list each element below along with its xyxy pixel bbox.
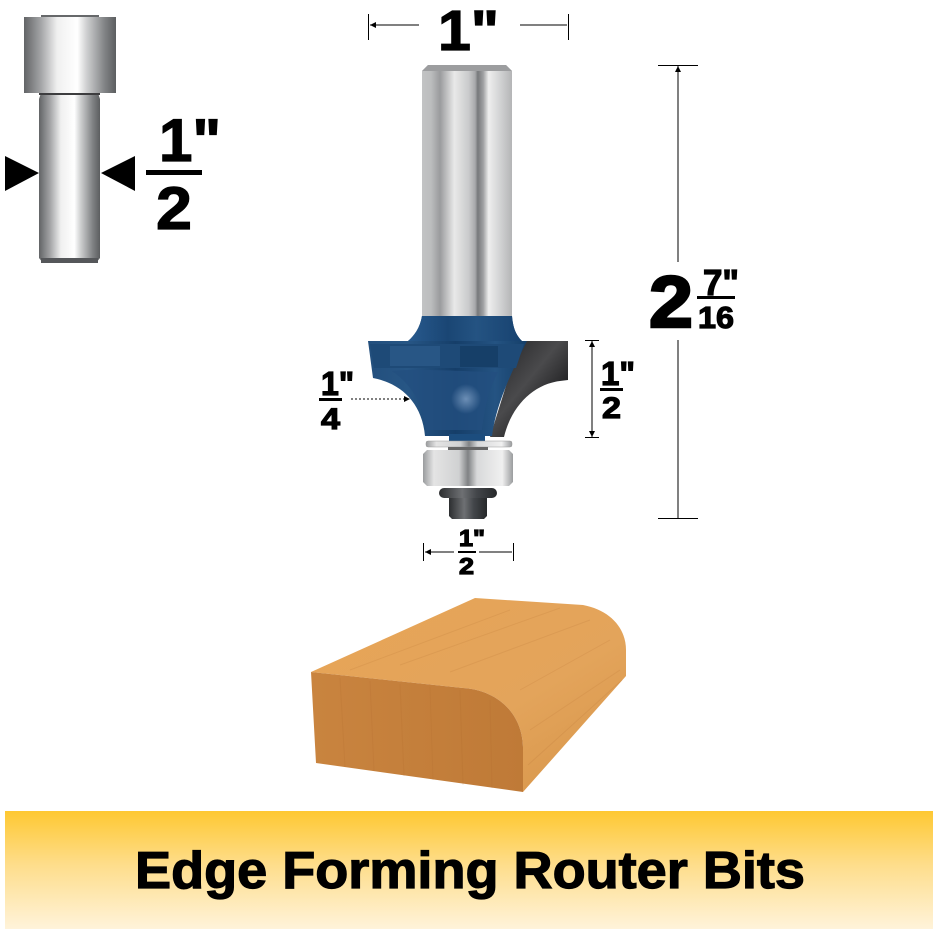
title: Edge Forming Router Bits [135,842,805,900]
dimension: overall length 2 7/16 inch [649,66,739,518]
wood grain [340,608,622,788]
front face [311,672,523,792]
retaining nut and screw [439,488,497,519]
dimension: bearing diameter 1/2 inch: 1" [459,525,485,551]
dimension: cutting height 1/2 inch: 1" [601,355,635,392]
dimension: bearing diameter 1/2 inch [424,525,514,579]
dimension: radius 1/4 inch: 1" [321,365,354,402]
dimension: cutting diameter 1 inch: 1" [438,0,499,63]
label: shank size one half inch [146,107,221,242]
dimension: radius 1/4 inch [319,365,410,436]
dimension: cutting diameter 1 inch [368,0,568,63]
top face [311,598,626,792]
dimension: overall length 2 7/16 inch: 16 [698,300,734,335]
dimension: bearing diameter 1/2 inch: 2 [459,553,474,579]
title banner [5,811,933,929]
dimension: cutting height 1/2 inch [585,340,635,438]
router bit [368,65,568,519]
dimension: cutting height 1/2 inch: 2 [602,392,621,425]
dimension: radius 1/4 inch: 4 [321,403,340,436]
wood profile sample [311,598,626,792]
shank [422,65,512,322]
dark carbide cutter [490,341,568,437]
label: shank size one half inch: 2 [156,175,192,242]
icon: shank diameter diagram [5,15,135,263]
washer and bearing [423,441,513,486]
dimension: overall length 2 7/16 inch: 7" [703,262,739,303]
dimension: overall length 2 7/16 inch: 2 [649,262,693,343]
blue cutter body [368,316,527,442]
label: shank size one half inch: 1" [159,107,221,174]
